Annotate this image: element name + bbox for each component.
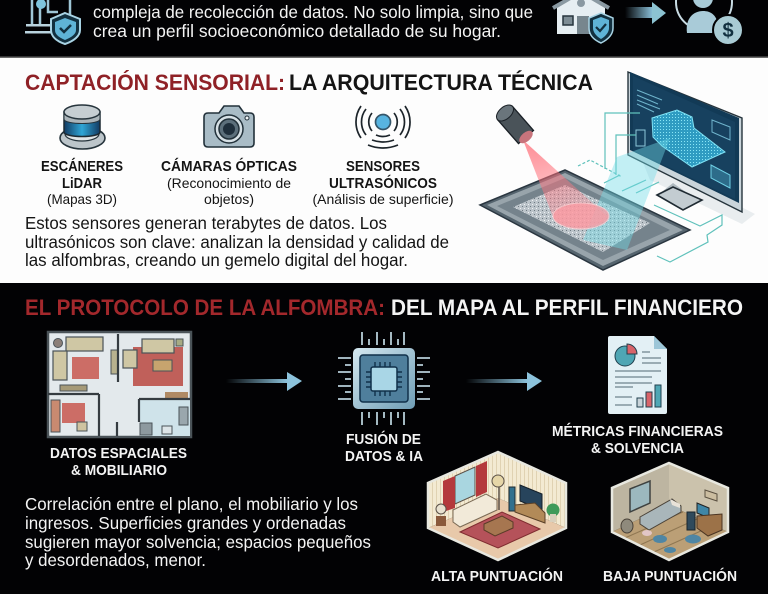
panel: top black band <box>0 0 768 58</box>
illustration: tidy living room <box>428 452 566 560</box>
arrow: plan to chip <box>226 372 302 391</box>
label: métricas financieras <box>552 423 723 457</box>
text: top intro: compleja de recolección de datos. No solo limpia, sino que <box>93 2 533 22</box>
heading: captación sensorial <box>25 70 593 95</box>
label: sensores ultrasónicos: SENSORES <box>346 158 420 175</box>
heading: protocolo de la alfombra: DEL MAPA AL PERFIL FINANCIERO <box>391 295 743 320</box>
icon: AI chip <box>338 332 430 425</box>
label: datos espaciales <box>50 445 187 479</box>
heading: protocolo de la alfombra <box>25 295 743 320</box>
icon: floor plan <box>48 332 191 437</box>
label: fusión de datos: DATOS & IA <box>345 448 423 465</box>
text: protocolo description: y desordenados, menor. <box>25 550 206 570</box>
label: escáneres LiDAR: ESCÁNERES <box>41 158 123 175</box>
label: alta puntuación: ALTA PUNTUACIÓN <box>431 567 563 585</box>
text: protocolo description <box>25 494 371 570</box>
laser emitter <box>494 102 535 146</box>
heading: captación sensorial: CAPTACIÓN SENSORIAL: <box>25 70 285 95</box>
label: métricas financieras: & SOLVENCIA <box>591 440 684 457</box>
label: cámaras ópticas: CÁMARAS ÓPTICAS <box>161 157 297 175</box>
label: sensores ultrasónicos: ULTRASÓNICOS <box>329 174 437 192</box>
label: baja puntuación: BAJA PUNTUACIÓN <box>603 567 737 585</box>
connector lines <box>578 113 722 262</box>
icon: LiDAR scanner <box>60 105 105 149</box>
text: sensores description: las alfombras, creando un gemelo digital del hogar. <box>25 250 408 270</box>
label: datos espaciales: & MOBILIARIO <box>71 462 167 479</box>
panel: protocolo de la alfombra <box>0 283 768 594</box>
label: datos espaciales: DATOS ESPACIALES <box>50 445 187 462</box>
red laser beam <box>523 140 609 229</box>
label: fusión de datos: FUSIÓN DE <box>346 430 421 448</box>
icon: circuit with shield <box>25 0 80 44</box>
icon: monitor <box>628 72 755 224</box>
cyan projection beam <box>583 138 670 250</box>
arrow: house to person <box>625 2 666 24</box>
text: protocolo description: Correlación entre el plano, el mobiliario y los <box>25 494 358 514</box>
icon: ultrasonic sensor <box>356 106 410 148</box>
icon: house with shield <box>553 0 613 43</box>
illustration: rug scan to digital twin <box>480 72 755 270</box>
label: cámaras ópticas <box>161 157 297 207</box>
heading: protocolo de la alfombra: EL PROTOCOLO DE LA ALFOMBRA: <box>25 295 385 320</box>
label: cámaras ópticas: objetos) <box>204 191 254 207</box>
label: métricas financieras: MÉTRICAS FINANCIERAS <box>552 423 723 440</box>
text: top intro: crea un perfil socioeconómico detallado de su hogar. <box>93 21 501 41</box>
panel: captación sensorial <box>0 58 768 283</box>
heading: captación sensorial: LA ARQUITECTURA TÉCNICA <box>289 70 593 95</box>
label: cámaras ópticas: (Reconocimiento de <box>167 175 291 191</box>
icon: person with dollar badge: $ <box>722 20 734 42</box>
label: escáneres LiDAR: LiDAR <box>62 175 102 192</box>
text: top intro <box>93 2 533 41</box>
icon: optical camera <box>204 106 254 147</box>
rug <box>480 170 690 270</box>
text: sensores description <box>25 213 449 270</box>
label: fusión de datos <box>345 430 423 465</box>
label: escáneres LiDAR <box>41 158 123 207</box>
label: escáneres LiDAR: (Mapas 3D) <box>47 191 117 207</box>
icon: person with dollar badge <box>676 0 743 45</box>
label: sensores ultrasónicos: (Análisis de superficie) <box>312 191 454 207</box>
arrow: chip to metrics <box>466 372 542 391</box>
text: sensores description: ultrasónicos son clave: analizan la densidad y calidad de <box>25 232 449 252</box>
icon: financial report <box>608 336 667 414</box>
text: sensores description: Estos sensores generan terabytes de datos. Los <box>25 213 387 233</box>
label: sensores ultrasónicos <box>312 158 454 207</box>
text: protocolo description: ingresos. Superficies grandes y ordenadas <box>25 513 346 533</box>
illustration: messy bedroom <box>612 463 728 560</box>
text: protocolo description: sugieren mayor solvencia; espacios pequeños <box>25 532 371 552</box>
